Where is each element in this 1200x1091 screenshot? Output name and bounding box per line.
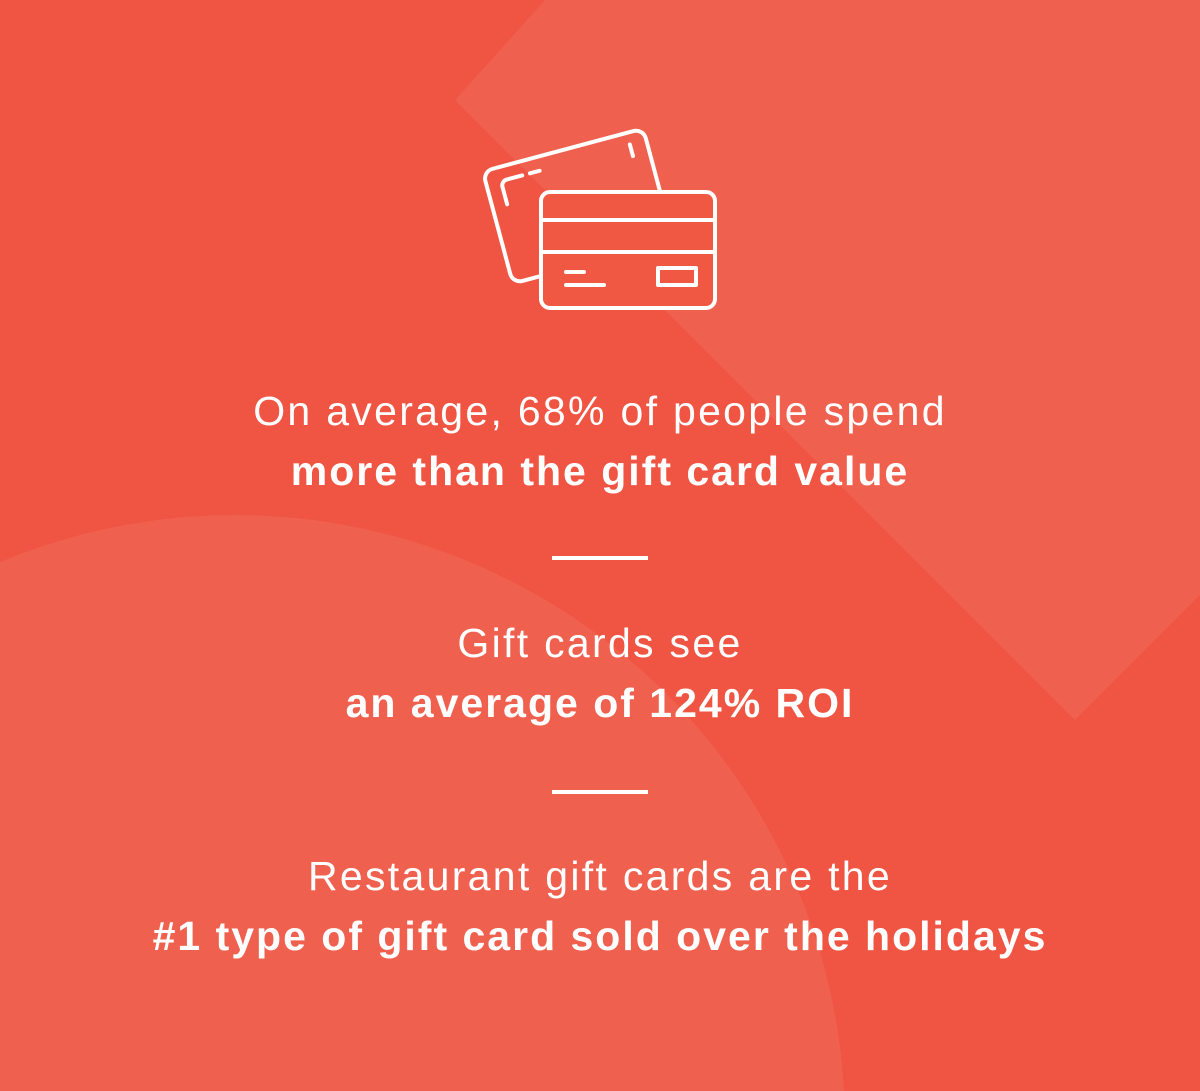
stat 3 text: #1 type of gift card sold over the holidays	[153, 913, 1047, 959]
stat 3 text: Restaurant gift cards are the	[308, 853, 892, 899]
stat 1 text: On average, 68% of people spend	[253, 388, 947, 434]
stat 2 text	[346, 620, 854, 726]
icon: gift cards	[483, 128, 717, 310]
stat 2 text: Gift cards see	[457, 620, 743, 666]
stat 2 text: an average of 124% ROI	[346, 680, 854, 726]
stat 1 text	[253, 388, 947, 494]
stat 1 text: more than the gift card value	[291, 448, 909, 494]
stat 3 text	[153, 853, 1047, 959]
